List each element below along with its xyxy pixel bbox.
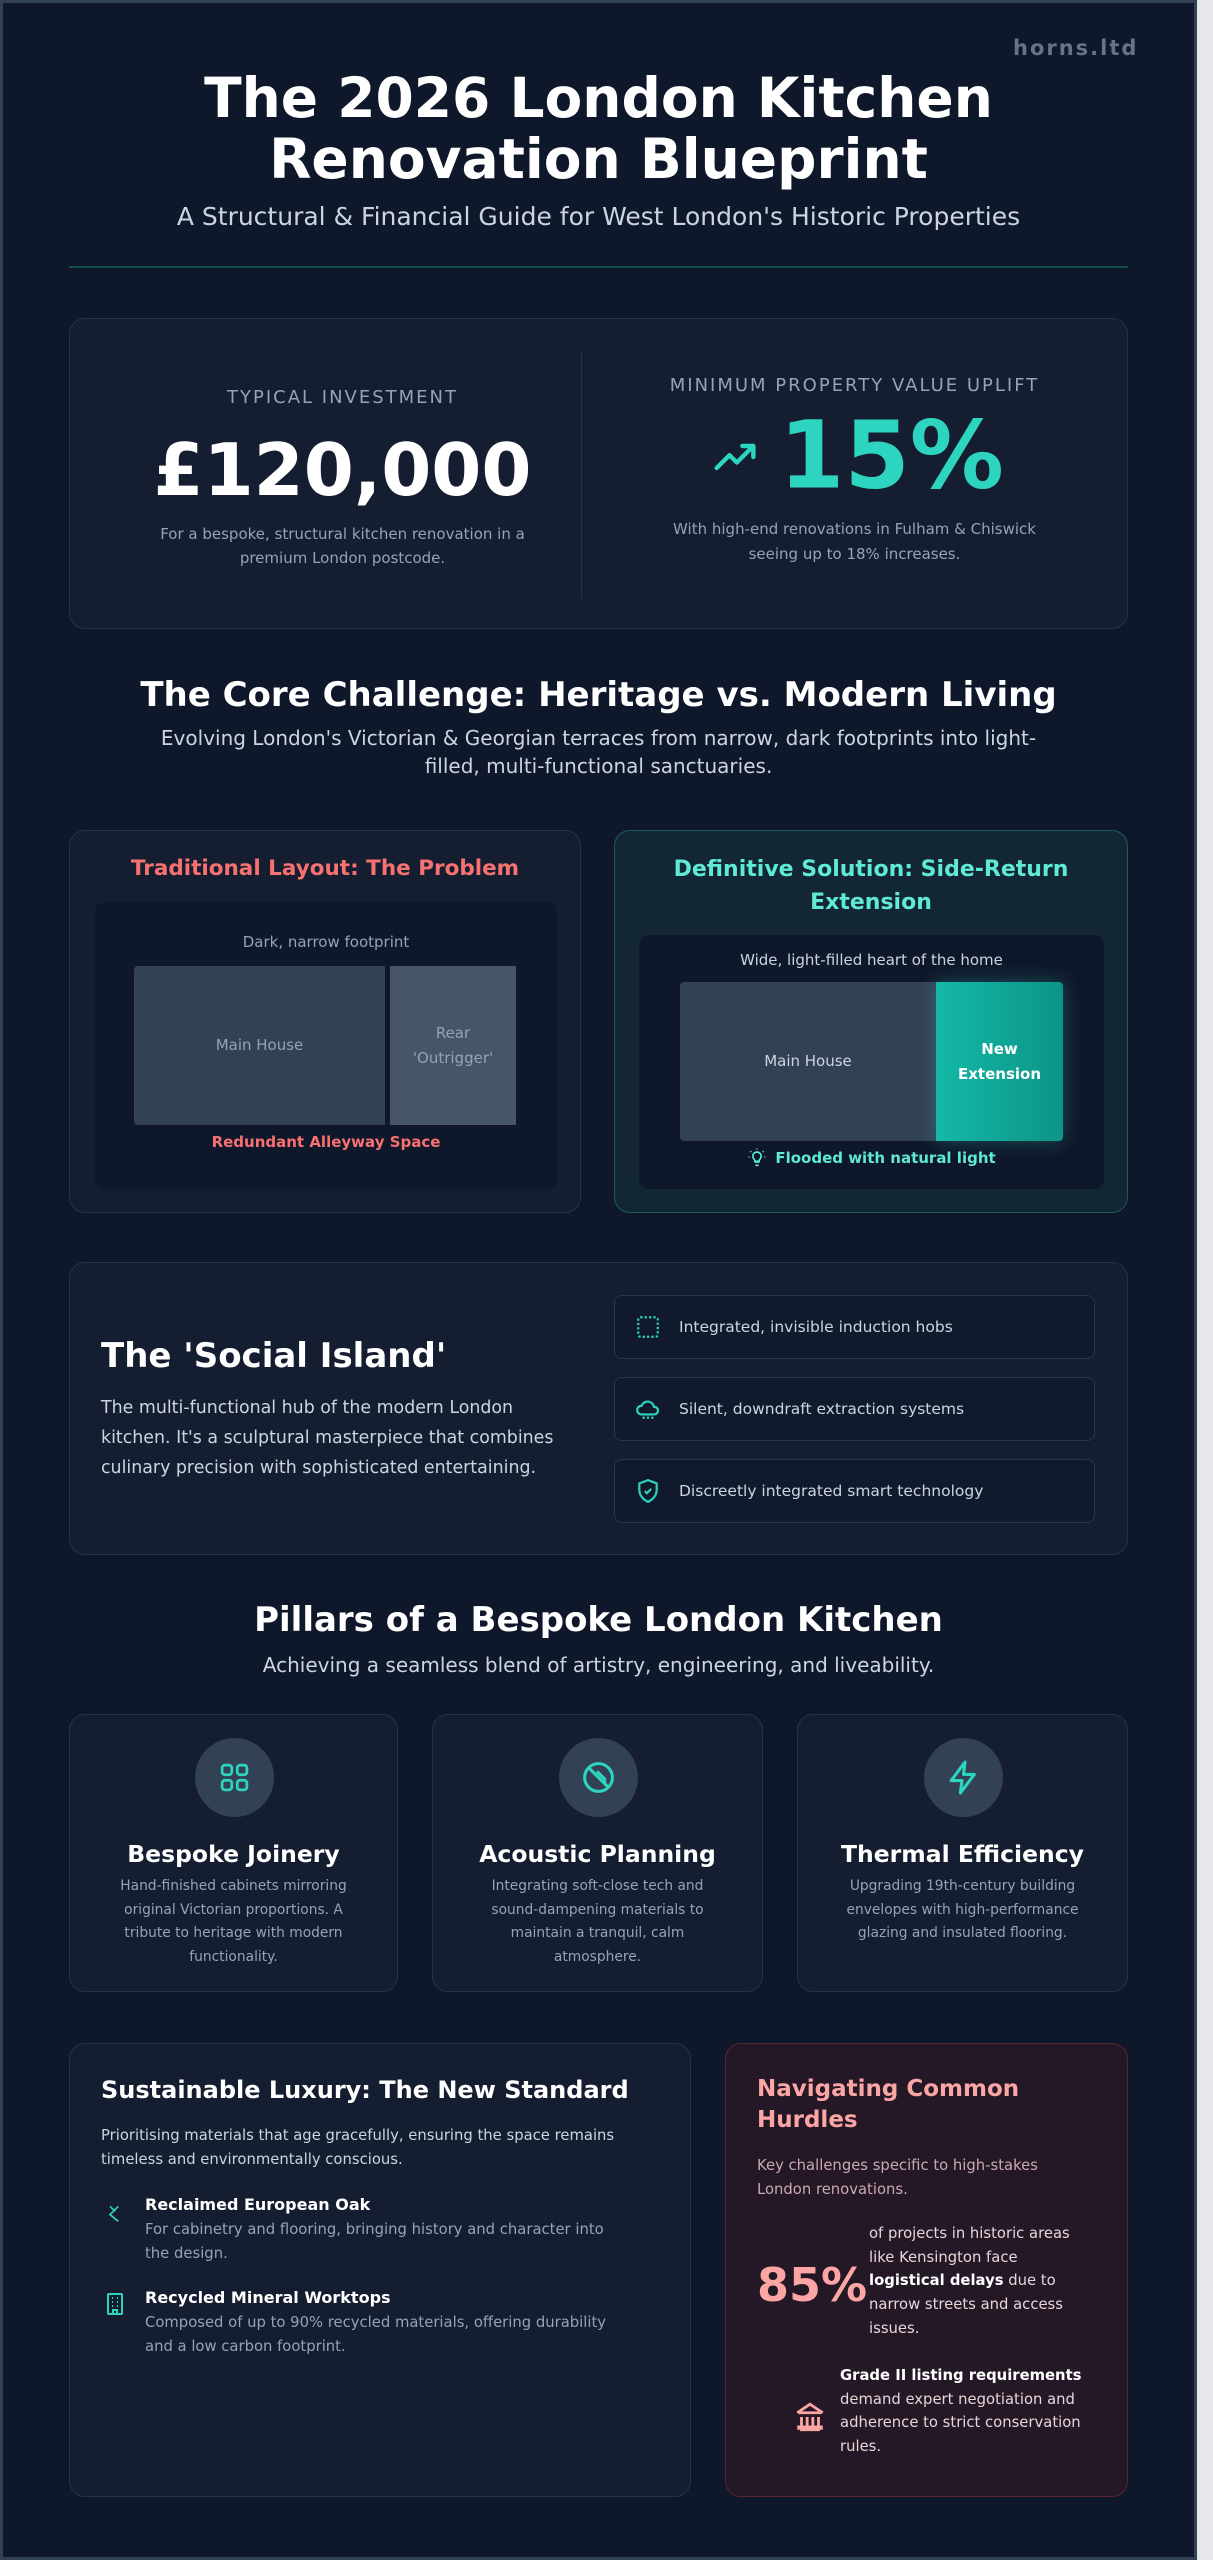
heading: social island: The 'Social Island': [101, 1336, 446, 1376]
feature: downdraft extraction: Silent, downdraft extraction systems: [679, 1400, 964, 1418]
item: reclaimed oak: For cabinetry and flooring, bringing history and character into the design.: [145, 2221, 604, 2262]
item: mineral worktops: Recycled Mineral Worktops: [145, 2288, 391, 2307]
icon: mute: [559, 1738, 638, 1817]
diagram: extension: [639, 935, 1104, 1189]
heading: pillars: Pillars of a Bespoke London Kitchen: [254, 1600, 943, 1640]
panel: common hurdles: [725, 2043, 1128, 2497]
block: main house: [680, 982, 936, 1141]
card: thermal efficiency: Upgrading 19th-century building envelopes with high-performance glazing and insulated flooring.: [846, 1878, 1079, 1941]
block: new extension: New: [981, 1040, 1018, 1058]
text: core challenge subtitle: [161, 726, 1036, 778]
block: main house: [134, 966, 385, 1125]
diagram: extension: Wide, light-filled heart of the home: [740, 951, 1003, 969]
heading: solution: [674, 857, 1068, 915]
text: sustainable description: Prioritising materials that age gracefully, ensuring the space remains timeless and environmentally conscious.: [101, 2127, 614, 2168]
stat: value uplift: 15%: [779, 402, 1004, 510]
stat: typical investment: £120,000: [153, 428, 532, 512]
stat: typical investment: For a bespoke, structural kitchen renovation in a: [160, 525, 525, 543]
item: grade II listing: Grade II listing requirements demand expert negotiation and adherence to strict conservation rules.: [840, 2367, 1081, 2455]
icon: trending up: [714, 444, 756, 470]
text: core challenge subtitle: Evolving London's Victorian & Georgian terraces from narrow, dark footprints into light-: [161, 726, 1036, 750]
stat: typical investment: premium London postcode.: [240, 549, 445, 567]
heading: solution: Extension: [810, 890, 932, 915]
card: thermal efficiency: Thermal Efficiency: [841, 1840, 1084, 1868]
stat: typical investment: [153, 387, 532, 567]
icon: grid: [195, 1738, 274, 1817]
item: reclaimed oak: Reclaimed European Oak: [145, 2195, 370, 2214]
item: reclaimed oak: [108, 2195, 604, 2262]
label: redundant space: Redundant Alleyway Space: [212, 1133, 440, 1151]
stat: value uplift: MINIMUM PROPERTY VALUE UPLIFT: [670, 375, 1039, 396]
block: main house: Main House: [216, 1036, 303, 1054]
block: rear outrigger: Rear: [436, 1024, 470, 1042]
diagram: traditional: Dark, narrow footprint: [243, 933, 409, 951]
panel: social island: [69, 1262, 1128, 1555]
stat: typical investment: TYPICAL INVESTMENT: [227, 387, 458, 408]
panel: sustainable luxury: [69, 2043, 691, 2497]
block: rear outrigger: 'Outrigger': [413, 1049, 493, 1067]
text: core challenge subtitle: filled, multi-functional sanctuaries.: [425, 754, 772, 778]
card: bespoke joinery: Hand-finished cabinets mirroring original Victorian proportions. A tribute to heritage with modern functionality.: [120, 1878, 347, 1964]
feature: downdraft extraction: [614, 1377, 1095, 1441]
text: hurdles description: Key challenges specific to high-stakes London renovations.: [757, 2157, 1038, 2198]
card: bespoke joinery: Bespoke Joinery: [127, 1840, 340, 1868]
icon: bolt: [924, 1738, 1003, 1817]
stat: value uplift: seeing up to 18% increases.: [749, 544, 960, 562]
block: new extension: [936, 982, 1063, 1141]
brand logo: horns.ltd: [1013, 36, 1138, 60]
heading: solution: Definitive Solution: Side-Return: [674, 857, 1068, 882]
item: mineral worktops: [107, 2288, 606, 2354]
panel: key stats: [69, 318, 1128, 629]
subtitle: A Structural & Financial Guide for West London's Historic Properties: [177, 202, 1020, 231]
block: main house: Main House: [764, 1052, 852, 1070]
text: pillars subtitle: Achieving a seamless blend of artistry, engineering, and liveability.: [263, 1653, 934, 1677]
title: Renovation Blueprint: [269, 127, 928, 191]
feature: induction hobs: Integrated, invisible induction hobs: [679, 1318, 953, 1336]
label: natural light: Flooded with natural light: [775, 1149, 996, 1167]
block: new extension: Extension: [958, 1065, 1041, 1083]
block: rear outrigger: [390, 966, 516, 1125]
card: bespoke joinery: [69, 1714, 398, 1992]
feature: smart technology: Discreetly integrated smart technology: [679, 1482, 983, 1500]
panel: side-return solution: [614, 830, 1128, 1213]
item: mineral worktops: Composed of up to 90% recycled materials, offering durability and a low carbon footprint.: [145, 2314, 606, 2354]
heading: problem: Traditional Layout: The Problem: [131, 856, 519, 881]
heading: sustainable: Sustainable Luxury: The New Standard: [101, 2076, 629, 2104]
diagram: traditional: [95, 902, 557, 1189]
stat: 85%: 85%: [757, 2258, 867, 2312]
panel: common hurdles: of projects in historic areas like Kensington face logistical delays due to narrow streets and access issues.: [869, 2225, 1070, 2337]
heading: hurdles: Hurdles: [757, 2107, 858, 2133]
card: acoustic planning: Integrating soft-close tech and sound-dampening materials to maintain a tranquil, calm atmosphere.: [491, 1878, 704, 1964]
feature: smart technology: [614, 1459, 1095, 1523]
card: thermal efficiency: [797, 1714, 1128, 1992]
heading: core challenge: The Core Challenge: Heritage vs. Modern Living: [140, 675, 1057, 715]
heading: hurdles: Navigating Common: [757, 2076, 1019, 2102]
heading: hurdles: [757, 2076, 1019, 2133]
card: acoustic planning: [432, 1714, 763, 1992]
stat: value uplift: [670, 375, 1039, 562]
feature: induction hobs: [614, 1295, 1095, 1359]
card: acoustic planning: Acoustic Planning: [479, 1840, 716, 1868]
title: [204, 66, 993, 191]
panel: traditional layout: [69, 830, 581, 1213]
text: social island description: The multi-functional hub of the modern London kitchen. It's a sculptural masterpiece that combines culinary precision with sophisticated entertaining.: [101, 1398, 553, 1478]
stat: value uplift: With high-end renovations in Fulham & Chiswick: [673, 520, 1036, 538]
title: The 2026 London Kitchen: [204, 66, 993, 130]
